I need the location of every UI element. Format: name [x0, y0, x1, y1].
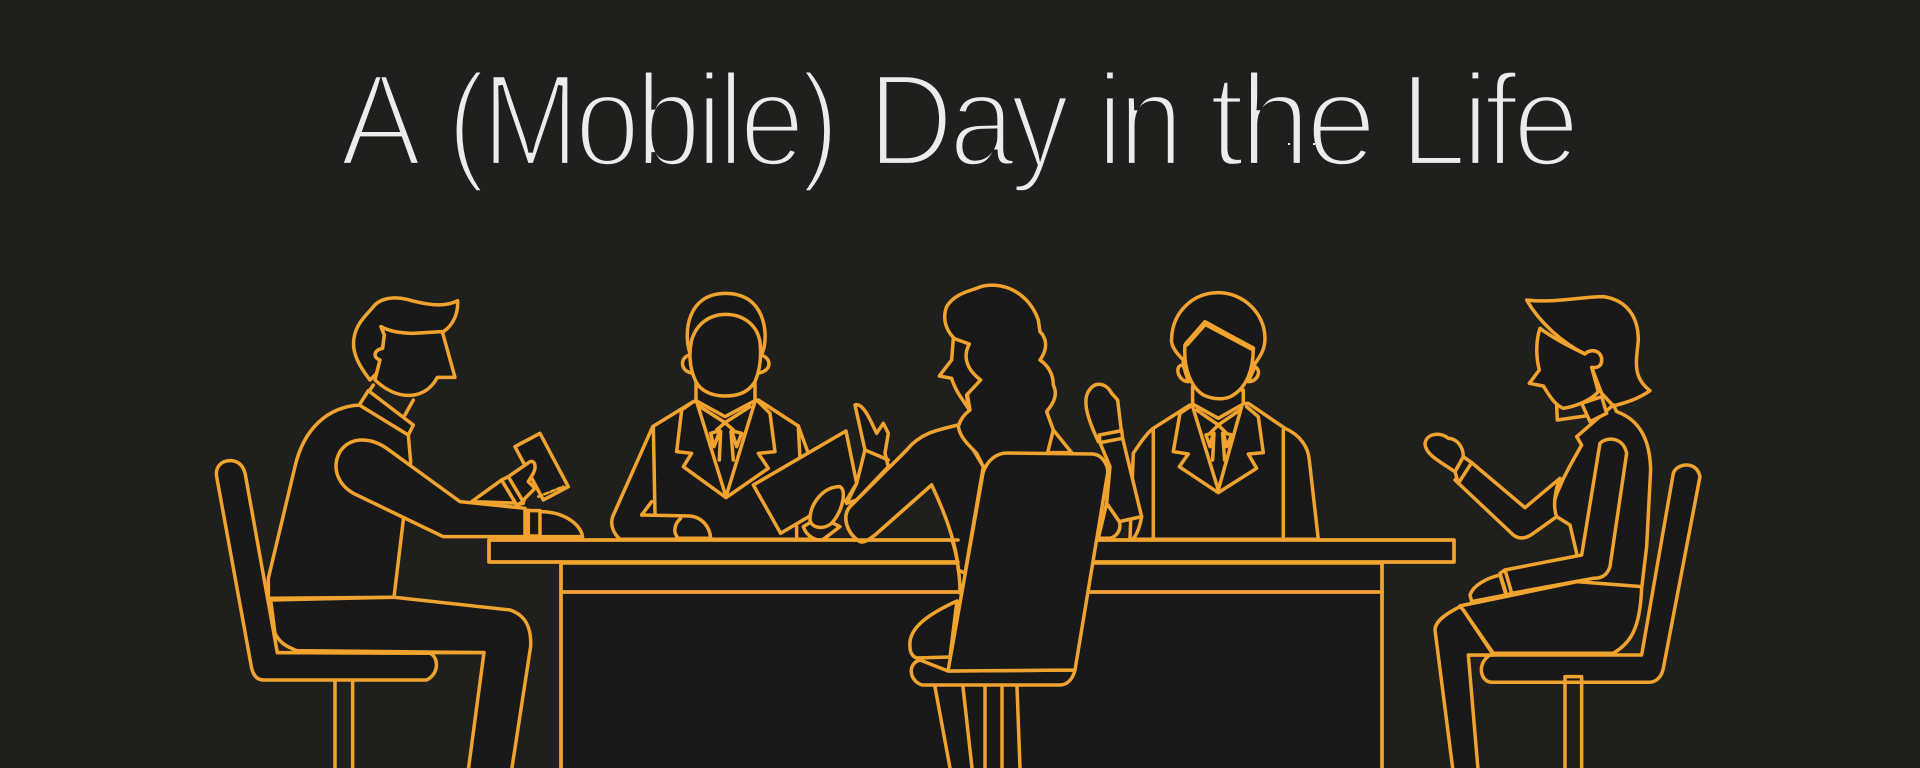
neck and chin — [1582, 397, 1607, 422]
table — [489, 540, 1454, 768]
person: back left man in suit — [612, 293, 823, 539]
chair — [216, 461, 436, 680]
legs — [271, 597, 531, 768]
chair seat — [911, 660, 1075, 685]
title: Life — [1400, 46, 1575, 194]
title: (Mobile) — [447, 46, 835, 194]
chair legs — [935, 687, 1020, 768]
person: woman with curly hair, back to viewer, and raised hand — [846, 285, 1142, 573]
chair — [1467, 465, 1700, 682]
lap of woman — [952, 540, 960, 593]
lap and leg — [1460, 582, 1642, 606]
face — [1529, 328, 1602, 408]
title: the — [1209, 46, 1372, 194]
table surface line redraw — [489, 540, 1454, 768]
phone — [515, 433, 568, 500]
chair back — [948, 453, 1108, 671]
raised arm and hand — [1455, 463, 1560, 538]
title specks — [1288, 143, 1315, 145]
title: in — [1097, 46, 1179, 194]
title — [340, 46, 1575, 194]
neck and collar — [360, 385, 413, 415]
near arm and hand — [525, 510, 583, 537]
title: Day — [868, 46, 1069, 194]
person: left man with phone on chair — [216, 298, 583, 768]
hair — [1527, 297, 1650, 406]
arm of woman overlapping the document — [846, 450, 932, 542]
front chair of woman — [910, 453, 1108, 768]
person: hand raised and document held in front of back left man — [753, 405, 888, 540]
title: A — [340, 46, 422, 194]
far arm and hand — [472, 480, 523, 505]
lap arm and hand — [1505, 439, 1627, 593]
torso — [268, 405, 411, 598]
person: back right man in suit — [1130, 293, 1318, 539]
body — [1460, 405, 1651, 653]
person: right woman on chair — [1425, 297, 1700, 768]
head — [354, 298, 458, 380]
